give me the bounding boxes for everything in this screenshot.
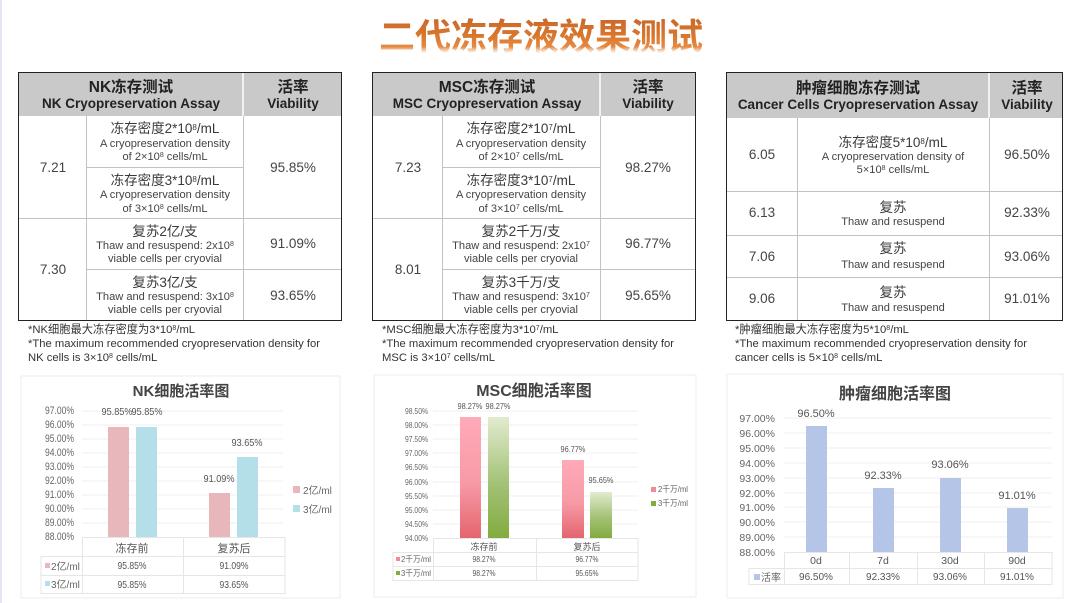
- cancer table rows: 复苏: [880, 199, 906, 215]
- MSC table rows: 7: [586, 292, 590, 299]
- cancer y axis: 89.00%: [739, 532, 775, 544]
- cancer data table: 0d: [810, 555, 822, 567]
- cancer footnote: *肿瘤细胞最大冻存密度为5*10: [735, 324, 886, 336]
- NK y axis: 94.00%: [45, 447, 74, 459]
- MSC y axis: 95.50%: [405, 491, 428, 501]
- MSC y axis: 94.50%: [405, 519, 428, 529]
- MSC table rows: of 2×10: [478, 151, 516, 163]
- MSC table header: [393, 77, 674, 111]
- cancer table rows: 8: [882, 165, 886, 172]
- MSC footnote: MSC is 3×10: [382, 352, 447, 364]
- MSC y axis: 95.00%: [405, 505, 428, 515]
- NK data table: 95.85%: [118, 560, 146, 572]
- NK table rows: 8: [230, 292, 234, 299]
- NK footnote: NK cells is 3×10: [28, 352, 109, 364]
- NK table rows: 复苏3亿/支: [132, 274, 198, 290]
- cancer bars: [806, 426, 1028, 552]
- NK data table: [41, 537, 285, 594]
- MSC table header: MSC冻存测试: [439, 77, 536, 96]
- NK table rows: 7.21: [40, 160, 66, 175]
- cancer table rows: 冻存密度5*10: [839, 135, 920, 150]
- NK y axis: 92.00%: [45, 475, 74, 487]
- cancer y axis: 91.00%: [739, 502, 775, 514]
- cancer table rows: 96.50%: [1004, 147, 1050, 162]
- cancer footnote: /mL: [890, 324, 909, 336]
- cancer y axis: 88.00%: [739, 547, 775, 559]
- MSC y axis: 97.00%: [405, 448, 428, 458]
- NK footnote: 8: [172, 325, 176, 332]
- cancer table rows: Thaw and resuspend: [841, 216, 945, 228]
- NK y axis: 96.00%: [45, 419, 74, 431]
- MSC footnote: /mL: [540, 324, 558, 336]
- cancer table header: 活率: [1011, 78, 1043, 97]
- NK table rows: 复苏2亿/支: [132, 223, 198, 239]
- MSC data labels: [458, 401, 614, 485]
- MSC table rows: 7: [516, 204, 520, 211]
- MSC data labels: 96.77%: [560, 444, 586, 454]
- NK chart title: NK细胞活率图: [133, 382, 229, 400]
- MSC table rows: /mL: [553, 173, 576, 188]
- cancer data table: 30d: [941, 555, 959, 567]
- cancer y axis: 93.00%: [739, 473, 775, 485]
- MSC table rows: 7: [586, 241, 590, 248]
- cancer table rows: 复苏: [880, 284, 906, 300]
- cancer y axis: 96.00%: [739, 428, 775, 440]
- NK table header: NK冻存测试: [89, 77, 174, 96]
- MSC y axis: 94.00%: [405, 533, 428, 543]
- cancer table rows: /mL: [925, 135, 948, 150]
- MSC data table: 95.65%: [576, 568, 599, 578]
- cancer table rows: 92.33%: [1004, 205, 1050, 220]
- MSC data table: 98.27%: [472, 568, 496, 578]
- cancer data labels: 93.06%: [931, 459, 969, 471]
- NK table rows: A cryopreservation density: [100, 138, 231, 150]
- NK footnote: *The maximum recommended cryopreservation density for: [28, 338, 320, 350]
- cancer table header: Cancer Cells Cryopreservation Assay: [738, 97, 979, 112]
- MSC data table: 2千万/ml: [401, 554, 431, 564]
- cancer footnote: 8: [886, 325, 890, 332]
- MSC data table: 98.27%: [472, 554, 496, 564]
- MSC data table: 冻存前: [470, 541, 498, 552]
- MSC data table: [393, 538, 638, 580]
- NK table rows: 冻存密度2*10: [111, 121, 192, 136]
- NK table rows: cells/mL: [164, 151, 208, 163]
- NK table header: [42, 77, 319, 111]
- NK table rows: 91.09%: [270, 236, 316, 251]
- cancer y axis: [739, 413, 775, 559]
- cancer y axis: 90.00%: [739, 517, 775, 529]
- NK table header: Viability: [267, 96, 319, 111]
- NK footnote: *NK细胞最大冻存密度为3*10: [28, 324, 172, 336]
- cancer y axis: 97.00%: [739, 413, 775, 425]
- NK legend: 2亿/ml: [303, 484, 332, 497]
- NK table rows: 冻存密度3*10: [111, 173, 192, 188]
- NK table rows: 8: [192, 175, 197, 184]
- NK data table: 复苏后: [218, 541, 250, 555]
- NK y axis: 93.00%: [45, 461, 74, 473]
- NK table rows: viable cells per cryovial: [108, 253, 222, 265]
- cancer footnote: *The maximum recommended cryopreservation density for: [735, 338, 1027, 350]
- NK table rows: Thaw and resuspend: 2x10: [96, 240, 230, 252]
- NK y axis: 95.00%: [45, 433, 74, 445]
- cancer table rows: 7.06: [749, 249, 775, 264]
- MSC table rows: 95.65%: [625, 288, 671, 303]
- MSC table header: Viability: [622, 96, 674, 111]
- cancer footnote: cells/mL: [838, 352, 882, 364]
- cancer table rows: 复苏: [880, 240, 906, 256]
- MSC table rows: /mL: [553, 121, 576, 136]
- cancer chart title: 肿瘤细胞活率图: [839, 384, 951, 403]
- cancer table header: Viability: [1001, 97, 1053, 112]
- NK legend: [293, 484, 332, 516]
- cancer data labels: 92.33%: [864, 470, 902, 482]
- NK table rows: 7.30: [40, 262, 66, 277]
- panel: cancer cells cryopreservation table: [726, 72, 1063, 321]
- cancer data table: [749, 552, 1052, 584]
- MSC footnote: *The maximum recommended cryopreservation density for: [382, 338, 674, 350]
- NK y axis: [45, 405, 74, 543]
- cancer footnote: [735, 322, 1027, 364]
- NK table rows: viable cells per cryovial: [108, 304, 222, 316]
- MSC table rows: 8.01: [395, 262, 421, 277]
- cancer data labels: 96.50%: [797, 408, 835, 420]
- MSC data labels: 98.27%: [458, 401, 483, 411]
- NK table rows: 95.85%: [270, 160, 316, 175]
- MSC table rows: cells/mL: [520, 151, 564, 163]
- MSC legend: 2千万/ml: [658, 484, 688, 494]
- NK bars: [108, 427, 258, 537]
- cancer y axis: 95.00%: [739, 443, 775, 455]
- MSC table rows: viable cells per cryovial: [464, 253, 578, 265]
- NK data labels: 95.85%: [132, 406, 162, 418]
- NK table rows: /mL: [197, 173, 220, 188]
- MSC table rows: 冻存密度3*10: [467, 173, 548, 188]
- NK data table: 2亿/ml: [51, 560, 80, 573]
- NK y axis: 89.00%: [45, 517, 74, 529]
- MSC bars: [460, 417, 612, 538]
- MSC table rows: 98.27%: [625, 160, 671, 175]
- cancer footnote: cancer cells is 5×10: [735, 352, 834, 364]
- NK table rows: [40, 120, 316, 316]
- MSC legend: 3千万/ml: [658, 498, 688, 508]
- panel: MSC cryopreservation table: [372, 72, 696, 321]
- MSC table rows: A cryopreservation density: [456, 138, 587, 150]
- cancer data labels: [797, 408, 1036, 502]
- MSC table rows: of 3×10: [478, 203, 516, 215]
- MSC footnote: [382, 322, 674, 364]
- NK table rows: 8: [160, 152, 164, 159]
- NK data labels: 91.09%: [204, 473, 234, 485]
- cancer table rows: 6.05: [749, 147, 775, 162]
- MSC table rows: 7: [548, 175, 553, 184]
- cancer table rows: 93.06%: [1004, 249, 1050, 264]
- NK table rows: /mL: [197, 121, 220, 136]
- MSC table rows: 冻存密度2*10: [467, 121, 548, 136]
- cancer data table: 7d: [877, 555, 889, 567]
- NK data table: 93.65%: [220, 579, 248, 591]
- NK table rows: 8: [160, 204, 164, 211]
- NK data table: 3亿/ml: [51, 578, 80, 591]
- MSC table rows: 7: [548, 123, 553, 132]
- cancer y axis: 92.00%: [739, 488, 775, 500]
- cancer data table: 91.01%: [1000, 572, 1034, 583]
- NK data table: 95.85%: [118, 579, 146, 591]
- MSC footnote: 7: [447, 353, 451, 360]
- NK table header: NK Cryopreservation Assay: [42, 96, 221, 111]
- NK table rows: 8: [192, 123, 197, 132]
- NK table rows: cells/mL: [164, 203, 208, 215]
- MSC y axis: 98.00%: [405, 420, 428, 430]
- cancer table rows: 91.01%: [1004, 291, 1050, 306]
- cancer data table: 93.06%: [933, 572, 967, 583]
- cancer data table: 96.50%: [799, 572, 833, 583]
- NK footnote: [28, 322, 320, 364]
- NK table rows: 8: [230, 241, 234, 248]
- MSC table rows: 复苏2千万/支: [482, 223, 561, 239]
- NK table rows: Thaw and resuspend: 3x10: [96, 291, 230, 303]
- NK data table: 冻存前: [116, 541, 148, 555]
- cancer table rows: [749, 134, 1050, 314]
- MSC y axis: 98.50%: [405, 406, 428, 416]
- NK legend: 3亿/ml: [303, 503, 332, 516]
- MSC y axis: 97.50%: [405, 434, 428, 444]
- MSC chart title: MSC细胞活率图: [476, 381, 592, 400]
- MSC table rows: 7: [516, 152, 520, 159]
- panel: NK cryopreservation table: [18, 72, 342, 321]
- cancer table rows: Thaw and resuspend: [841, 302, 945, 314]
- MSC data labels: 98.27%: [486, 401, 511, 411]
- MSC table rows: A cryopreservation density: [456, 189, 587, 201]
- MSC table header: MSC Cryopreservation Assay: [393, 96, 582, 111]
- NK data labels: [102, 406, 262, 485]
- cancer table rows: 6.13: [749, 205, 775, 220]
- MSC data labels: 95.65%: [588, 475, 614, 485]
- MSC table rows: 7.23: [395, 160, 421, 175]
- panel: NK viability chart: [21, 376, 340, 598]
- MSC y axis: [405, 406, 428, 543]
- NK y axis: 88.00%: [45, 531, 74, 543]
- MSC table rows: 96.77%: [625, 236, 671, 251]
- MSC table rows: Thaw and resuspend: 3x10: [452, 291, 586, 303]
- NK table header: 活率: [277, 77, 309, 96]
- title: 二代冻存液效果测试: [379, 16, 703, 57]
- cancer data table: 90d: [1008, 555, 1026, 567]
- NK footnote: cells/mL: [113, 352, 157, 364]
- MSC legend: [651, 484, 688, 508]
- cancer table rows: Thaw and resuspend: [841, 259, 945, 271]
- cancer table header: [738, 78, 1053, 112]
- NK y axis: 97.00%: [45, 405, 74, 417]
- cancer table rows: 5×10: [857, 164, 882, 176]
- cancer footnote: 8: [834, 353, 838, 360]
- NK y axis: 90.00%: [45, 503, 74, 515]
- NK table rows: of 3×10: [122, 203, 160, 215]
- cancer data table: 活率: [761, 571, 781, 584]
- panel: cancer cells viability chart: [727, 374, 1063, 598]
- NK table rows: A cryopreservation density: [100, 189, 231, 201]
- MSC footnote: *MSC细胞最大冻存密度为3*10: [382, 324, 536, 336]
- MSC footnote: cells/mL: [451, 352, 495, 364]
- MSC table rows: Thaw and resuspend: 2x10: [452, 240, 586, 252]
- cancer table rows: A cryopreservation density of: [822, 151, 965, 163]
- cancer y axis: 94.00%: [739, 458, 775, 470]
- MSC table rows: cells/mL: [520, 203, 564, 215]
- cancer table rows: 9.06: [749, 291, 775, 306]
- NK footnote: 8: [109, 353, 113, 360]
- MSC y axis: 96.50%: [405, 462, 428, 472]
- NK y axis: 91.00%: [45, 489, 74, 501]
- cancer table rows: 8: [920, 137, 925, 146]
- MSC table header: 活率: [632, 77, 664, 96]
- cancer table header: 肿瘤细胞冻存测试: [796, 78, 920, 97]
- MSC table rows: 复苏3千万/支: [482, 274, 561, 290]
- NK data labels: 93.65%: [232, 437, 262, 449]
- MSC footnote: 7: [536, 325, 540, 332]
- NK table rows: of 2×10: [122, 151, 160, 163]
- MSC table rows: viable cells per cryovial: [464, 304, 578, 316]
- cancer data labels: 91.01%: [998, 490, 1036, 502]
- MSC data table: 复苏后: [573, 541, 601, 552]
- MSC data table: 96.77%: [576, 554, 599, 564]
- panel: MSC viability chart: [374, 375, 696, 597]
- NK footnote: /mL: [176, 324, 195, 336]
- NK data labels: 95.85%: [102, 406, 132, 418]
- NK table rows: 93.65%: [270, 288, 316, 303]
- NK data table: 91.09%: [220, 560, 248, 572]
- MSC data table: 3千万/ml: [401, 568, 431, 578]
- cancer table rows: cells/mL: [886, 164, 929, 176]
- MSC table rows: [395, 120, 671, 316]
- cancer data table: 92.33%: [866, 572, 900, 583]
- MSC y axis: 96.00%: [405, 477, 428, 487]
